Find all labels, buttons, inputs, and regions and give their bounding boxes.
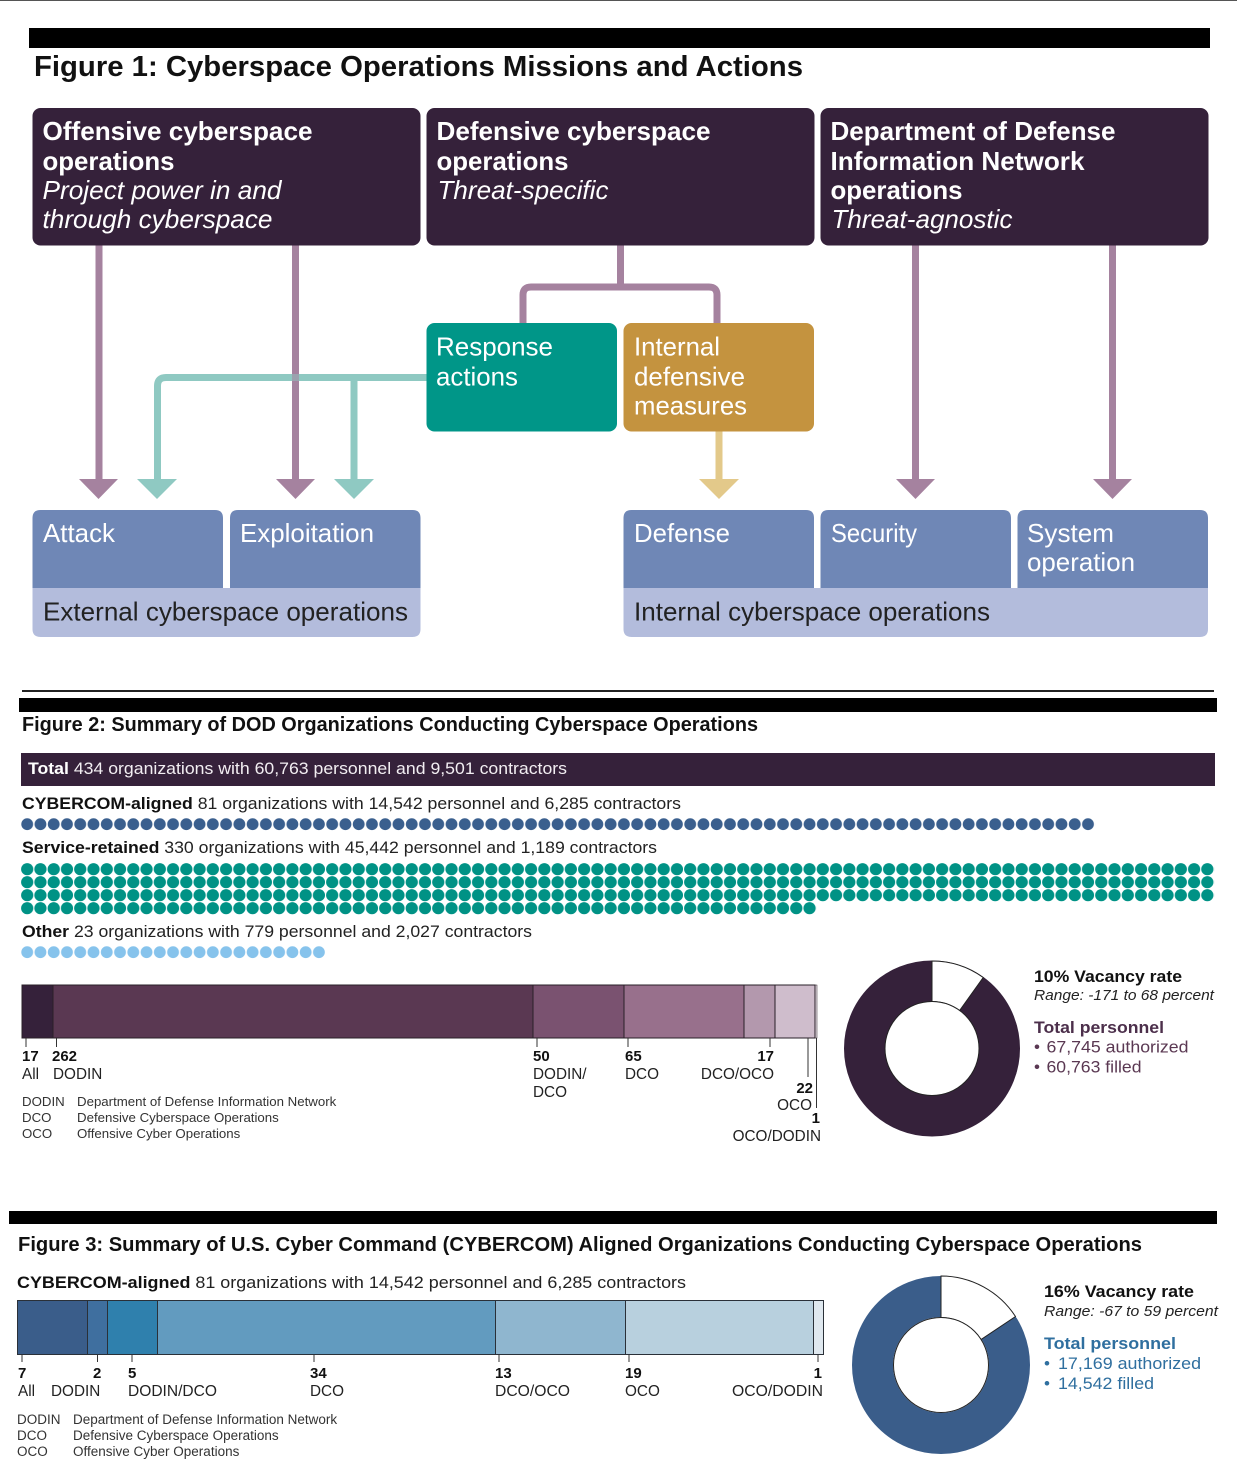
box: internal defensive measures: defensive bbox=[634, 362, 745, 392]
panel: internal cyberspace operations: Internal cyberspace operations bbox=[634, 596, 990, 626]
vacancy text: • bbox=[1044, 1374, 1050, 1393]
legend: DCO bbox=[22, 1110, 51, 1125]
panel: external cyberspace operations bbox=[32, 510, 420, 637]
panel: internal cyberspace operations bbox=[624, 510, 1208, 637]
vacancy text: • bbox=[1034, 1038, 1040, 1056]
bar labels: OCO bbox=[625, 1383, 660, 1400]
bar labels: 7 bbox=[18, 1365, 26, 1382]
panel: internal cyberspace operations: System bbox=[1027, 518, 1114, 548]
bar labels: 2 bbox=[93, 1365, 101, 1382]
figure 1 bbox=[29, 28, 1210, 637]
bar labels: DCO/OCO bbox=[495, 1383, 570, 1400]
total banner bbox=[21, 753, 1215, 786]
box: response actions: Response bbox=[436, 332, 553, 362]
vacancy text: 60,763 filled bbox=[1046, 1058, 1142, 1076]
panel: external cyberspace operations: Attack bbox=[43, 518, 116, 548]
box: DODIN operations: Threat-agnostic bbox=[832, 204, 1012, 234]
figure 3 bbox=[9, 1211, 1219, 1459]
legend: Defensive Cyberspace Operations bbox=[73, 1428, 279, 1443]
bar labels: 262 bbox=[52, 1048, 77, 1065]
bar labels: OCO/DODIN bbox=[733, 1128, 821, 1145]
vacancy text: 16% Vacancy rate bbox=[1044, 1282, 1194, 1301]
vacancy text: Range: -67 to 59 percent bbox=[1044, 1303, 1219, 1320]
box: response actions bbox=[426, 323, 617, 432]
box: internal defensive measures: measures bbox=[634, 390, 747, 420]
figure 3 header bar bbox=[9, 1211, 1217, 1224]
bar labels: 50 bbox=[533, 1048, 550, 1065]
stacked bar: cybercom mission types bbox=[18, 1300, 824, 1354]
service-retained row bbox=[21, 838, 1214, 915]
legend: Offensive Cyber Operations bbox=[77, 1126, 241, 1141]
box: internal defensive measures bbox=[624, 323, 814, 432]
bar labels: DODIN/DCO bbox=[128, 1383, 217, 1400]
cybercom summary line: CYBERCOM-aligned 81 organizations with 14,542 personnel and 6,285 contractors bbox=[17, 1273, 686, 1292]
vacancy text: 10% Vacancy rate bbox=[1034, 967, 1182, 986]
bar labels: 65 bbox=[625, 1048, 642, 1065]
legend: OCO bbox=[17, 1444, 48, 1459]
vacancy text bbox=[1044, 1282, 1219, 1393]
panel: internal cyberspace operations: operation bbox=[1027, 547, 1135, 577]
box: defensive cyberspace operations: Defensive cyberspace bbox=[436, 116, 710, 146]
legend bbox=[17, 1412, 337, 1459]
box: offensive cyberspace operations: Offensive cyberspace bbox=[42, 116, 312, 146]
legend: OCO bbox=[22, 1126, 52, 1141]
vacancy text: • bbox=[1044, 1354, 1050, 1373]
box: defensive cyberspace operations: Threat-specific bbox=[438, 175, 608, 205]
arrows: purple connectors bbox=[79, 245, 1132, 499]
figure 1 header bar bbox=[29, 28, 1210, 48]
panel: internal cyberspace operations: Defense bbox=[634, 518, 730, 548]
vacancy text: 67,745 authorized bbox=[1046, 1038, 1188, 1056]
bar labels: All bbox=[18, 1383, 35, 1400]
bar labels: DCO bbox=[625, 1066, 659, 1083]
bar labels: 19 bbox=[625, 1365, 642, 1382]
arrow: internal defensive measures to defense bbox=[699, 431, 739, 499]
box: offensive cyberspace operations: Project power in and bbox=[42, 175, 283, 205]
box: defensive cyberspace operations: operations bbox=[436, 146, 568, 176]
bar labels: All bbox=[22, 1066, 39, 1083]
bar labels: 17 bbox=[757, 1048, 774, 1065]
box: DODIN operations: operations bbox=[830, 175, 962, 205]
other row bbox=[21, 922, 532, 959]
bar labels: 34 bbox=[310, 1365, 327, 1382]
legend: Department of Defense Information Network bbox=[73, 1412, 337, 1427]
bar labels: 22 bbox=[796, 1080, 813, 1097]
box: internal defensive measures: Internal bbox=[634, 332, 720, 362]
bar labels: DCO bbox=[533, 1084, 567, 1101]
bar labels: 17 bbox=[22, 1048, 39, 1065]
donut: vacancy rate 16% bbox=[872, 1276, 1016, 1434]
bar labels: 1 bbox=[812, 1110, 820, 1127]
donut: vacancy rate 10% bbox=[864, 961, 1000, 1116]
vacancy text: Range: -171 to 68 percent bbox=[1034, 987, 1215, 1004]
box: DODIN operations: Information Network bbox=[830, 146, 1085, 176]
figure 2 title: Figure 2: Summary of DOD Organizations Conducting Cyberspace Operations bbox=[22, 714, 758, 736]
box: defensive cyberspace operations bbox=[426, 108, 814, 246]
bar labels: OCO/DODIN bbox=[732, 1383, 823, 1400]
cybercom-aligned row bbox=[21, 794, 1095, 831]
service-retained row: Service-retained 330 organizations with 45,442 personnel and 1,189 contractors bbox=[22, 838, 657, 857]
figure 2 header bar bbox=[19, 698, 1217, 712]
total banner: Total 434 organizations with 60,763 personnel and 9,501 contractors bbox=[28, 759, 567, 778]
box: offensive cyberspace operations: operations bbox=[42, 146, 174, 176]
box: DODIN operations bbox=[820, 108, 1208, 246]
legend: Offensive Cyber Operations bbox=[73, 1444, 240, 1459]
bar labels: DCO bbox=[310, 1383, 344, 1400]
vacancy text: Total personnel bbox=[1034, 1018, 1164, 1037]
bar tick marks bbox=[26, 1038, 816, 1108]
bar labels: DODIN bbox=[53, 1066, 102, 1083]
arrows: teal response connectors bbox=[137, 374, 427, 499]
figure 1 title: Figure 1: Cyberspace Operations Missions and Actions bbox=[34, 51, 803, 83]
bar labels: DODIN/ bbox=[533, 1066, 587, 1083]
bar labels bbox=[22, 1048, 821, 1145]
bar labels: 5 bbox=[128, 1365, 136, 1382]
legend: Defensive Cyberspace Operations bbox=[77, 1110, 279, 1125]
legend: DODIN bbox=[22, 1094, 65, 1109]
panel: external cyberspace operations: Exploitation bbox=[240, 518, 374, 548]
stacked bar: mission types bbox=[22, 985, 817, 1038]
cybercom-aligned row: CYBERCOM-aligned 81 organizations with 14,542 personnel and 6,285 contractors bbox=[22, 794, 681, 813]
vacancy text bbox=[1034, 967, 1215, 1076]
legend: Department of Defense Information Network bbox=[77, 1094, 337, 1109]
bar tick marks bbox=[22, 1355, 818, 1362]
panel: internal cyberspace operations: Security bbox=[831, 518, 917, 548]
bar labels: OCO bbox=[777, 1097, 812, 1114]
bar labels: DCO/OCO bbox=[701, 1066, 774, 1083]
bar labels: DODIN bbox=[51, 1383, 100, 1400]
vacancy text: 14,542 filled bbox=[1058, 1374, 1154, 1393]
box: DODIN operations: Department of Defense bbox=[830, 116, 1116, 146]
legend bbox=[22, 1094, 337, 1141]
vacancy text: Total personnel bbox=[1044, 1334, 1176, 1353]
panel: external cyberspace operations: External cyberspace operations bbox=[43, 596, 408, 626]
figure 3 title: Figure 3: Summary of U.S. Cyber Command (CYBERCOM) Aligned Organizations Conducting Cyberspace Operations bbox=[18, 1234, 1142, 1256]
legend: DODIN bbox=[17, 1412, 60, 1427]
vacancy text: 17,169 authorized bbox=[1058, 1354, 1201, 1373]
bar labels bbox=[18, 1365, 823, 1400]
box: response actions: actions bbox=[436, 362, 518, 392]
vacancy text: • bbox=[1034, 1058, 1040, 1076]
figure 2 bbox=[19, 698, 1217, 1145]
bar labels: 13 bbox=[495, 1365, 512, 1382]
legend: DCO bbox=[17, 1428, 47, 1443]
box: offensive cyberspace operations: through cyberspace bbox=[42, 204, 272, 234]
other row: Other 23 organizations with 779 personnel and 2,027 contractors bbox=[22, 922, 532, 941]
bar labels: 1 bbox=[814, 1365, 822, 1382]
box: offensive cyberspace operations bbox=[32, 108, 420, 246]
